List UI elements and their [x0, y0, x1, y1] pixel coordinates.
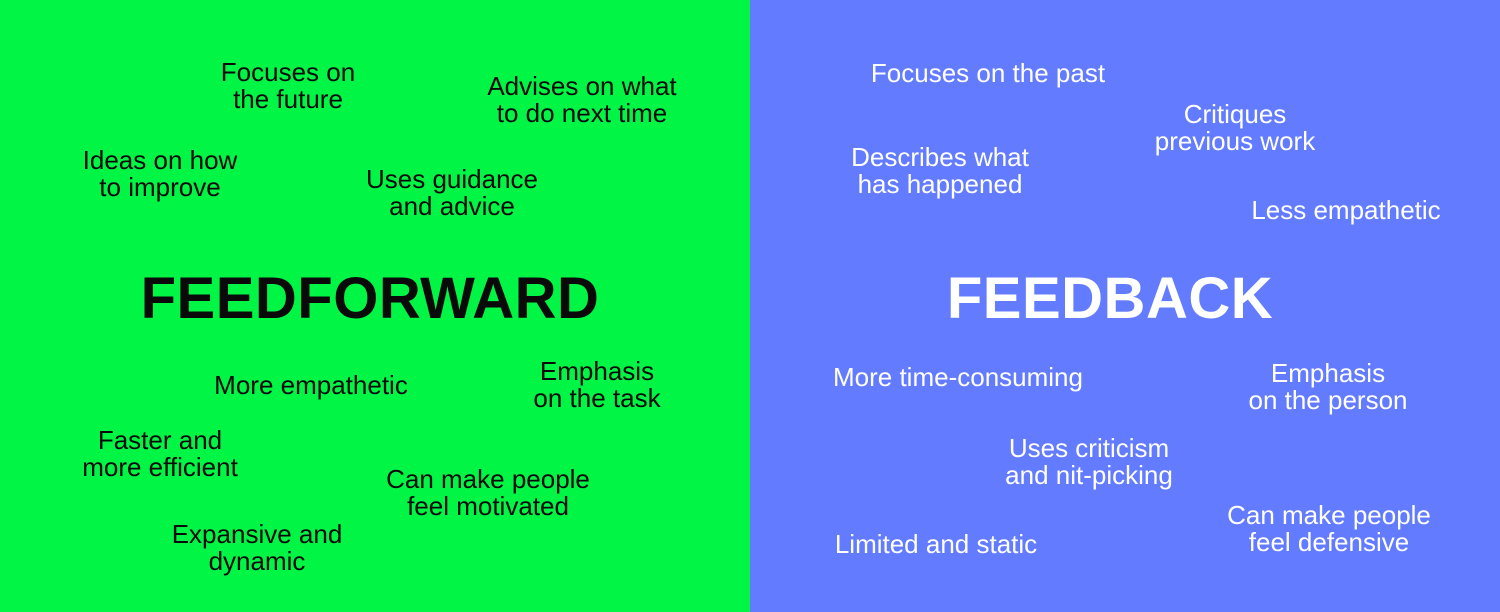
text: ideas on how to improve: to improve: [99, 172, 221, 202]
text: limited and static: Limited and static: [835, 529, 1037, 559]
panel: feedback: [750, 0, 1500, 612]
text: uses criticism and nit-picking: Uses criticism: [1009, 433, 1169, 463]
panel: feedforward: [0, 0, 750, 612]
text: uses criticism and nit-picking: [1005, 433, 1173, 490]
heading: feedforward: FEEDFORWARD: [141, 266, 599, 331]
text: advises on what to do next time: Advises on what: [487, 71, 677, 101]
text: focuses on the future: the future: [233, 84, 343, 114]
text: less empathetic: Less empathetic: [1251, 195, 1441, 225]
text: emphasis on the task: on the task: [533, 383, 661, 413]
text: emphasis on the person: on the person: [1248, 385, 1408, 415]
text: emphasis on the task: [533, 356, 661, 413]
text: advises on what to do next time: [487, 71, 677, 128]
text: expansive and dynamic: Expansive and: [172, 519, 342, 549]
text: expansive and dynamic: dynamic: [209, 546, 305, 576]
text: expansive and dynamic: [172, 519, 342, 576]
text: ideas on how to improve: [83, 145, 238, 202]
text: describes what has happened: has happened: [858, 169, 1022, 199]
text: uses guidance and advice: [366, 164, 538, 221]
text: more empathetic: More empathetic: [214, 370, 408, 400]
text: can make people feel motivated: feel motivated: [407, 491, 569, 521]
heading: feedback: FEEDBACK: [947, 266, 1273, 331]
text: emphasis on the task: Emphasis: [540, 356, 654, 386]
text: uses guidance and advice: and advice: [389, 191, 515, 221]
text: critiques previous work: previous work: [1155, 126, 1315, 156]
text: focuses on the future: [221, 57, 355, 114]
text: faster and more efficient: [82, 425, 238, 482]
text: can make people feel defensive: [1227, 500, 1431, 557]
text: describes what has happened: [851, 142, 1029, 199]
text: focuses on the past: Focuses on the past: [871, 58, 1105, 88]
text: can make people feel defensive: Can make people: [1227, 500, 1431, 530]
text: emphasis on the person: [1248, 358, 1408, 415]
text: uses criticism and nit-picking: and nit-picking: [1005, 460, 1173, 490]
text: ideas on how to improve: Ideas on how: [83, 145, 237, 175]
text: faster and more efficient: more efficient: [82, 452, 238, 482]
text: can make people feel defensive: feel defensive: [1249, 527, 1409, 557]
text: can make people feel motivated: Can make people: [386, 464, 590, 494]
text: describes what has happened: Describes what: [851, 142, 1029, 172]
text: more time-consuming: More time-consuming: [833, 362, 1083, 392]
text: faster and more efficient: Faster and: [98, 425, 222, 455]
text: advises on what to do next time: to do next time: [497, 98, 667, 128]
text: critiques previous work: Critiques: [1184, 99, 1286, 129]
text: emphasis on the person: Emphasis: [1271, 358, 1385, 388]
text: focuses on the future: Focuses on: [221, 57, 355, 87]
text: uses guidance and advice: Uses guidance: [366, 164, 538, 194]
text: can make people feel motivated: [386, 464, 590, 521]
text: critiques previous work: [1155, 99, 1316, 156]
